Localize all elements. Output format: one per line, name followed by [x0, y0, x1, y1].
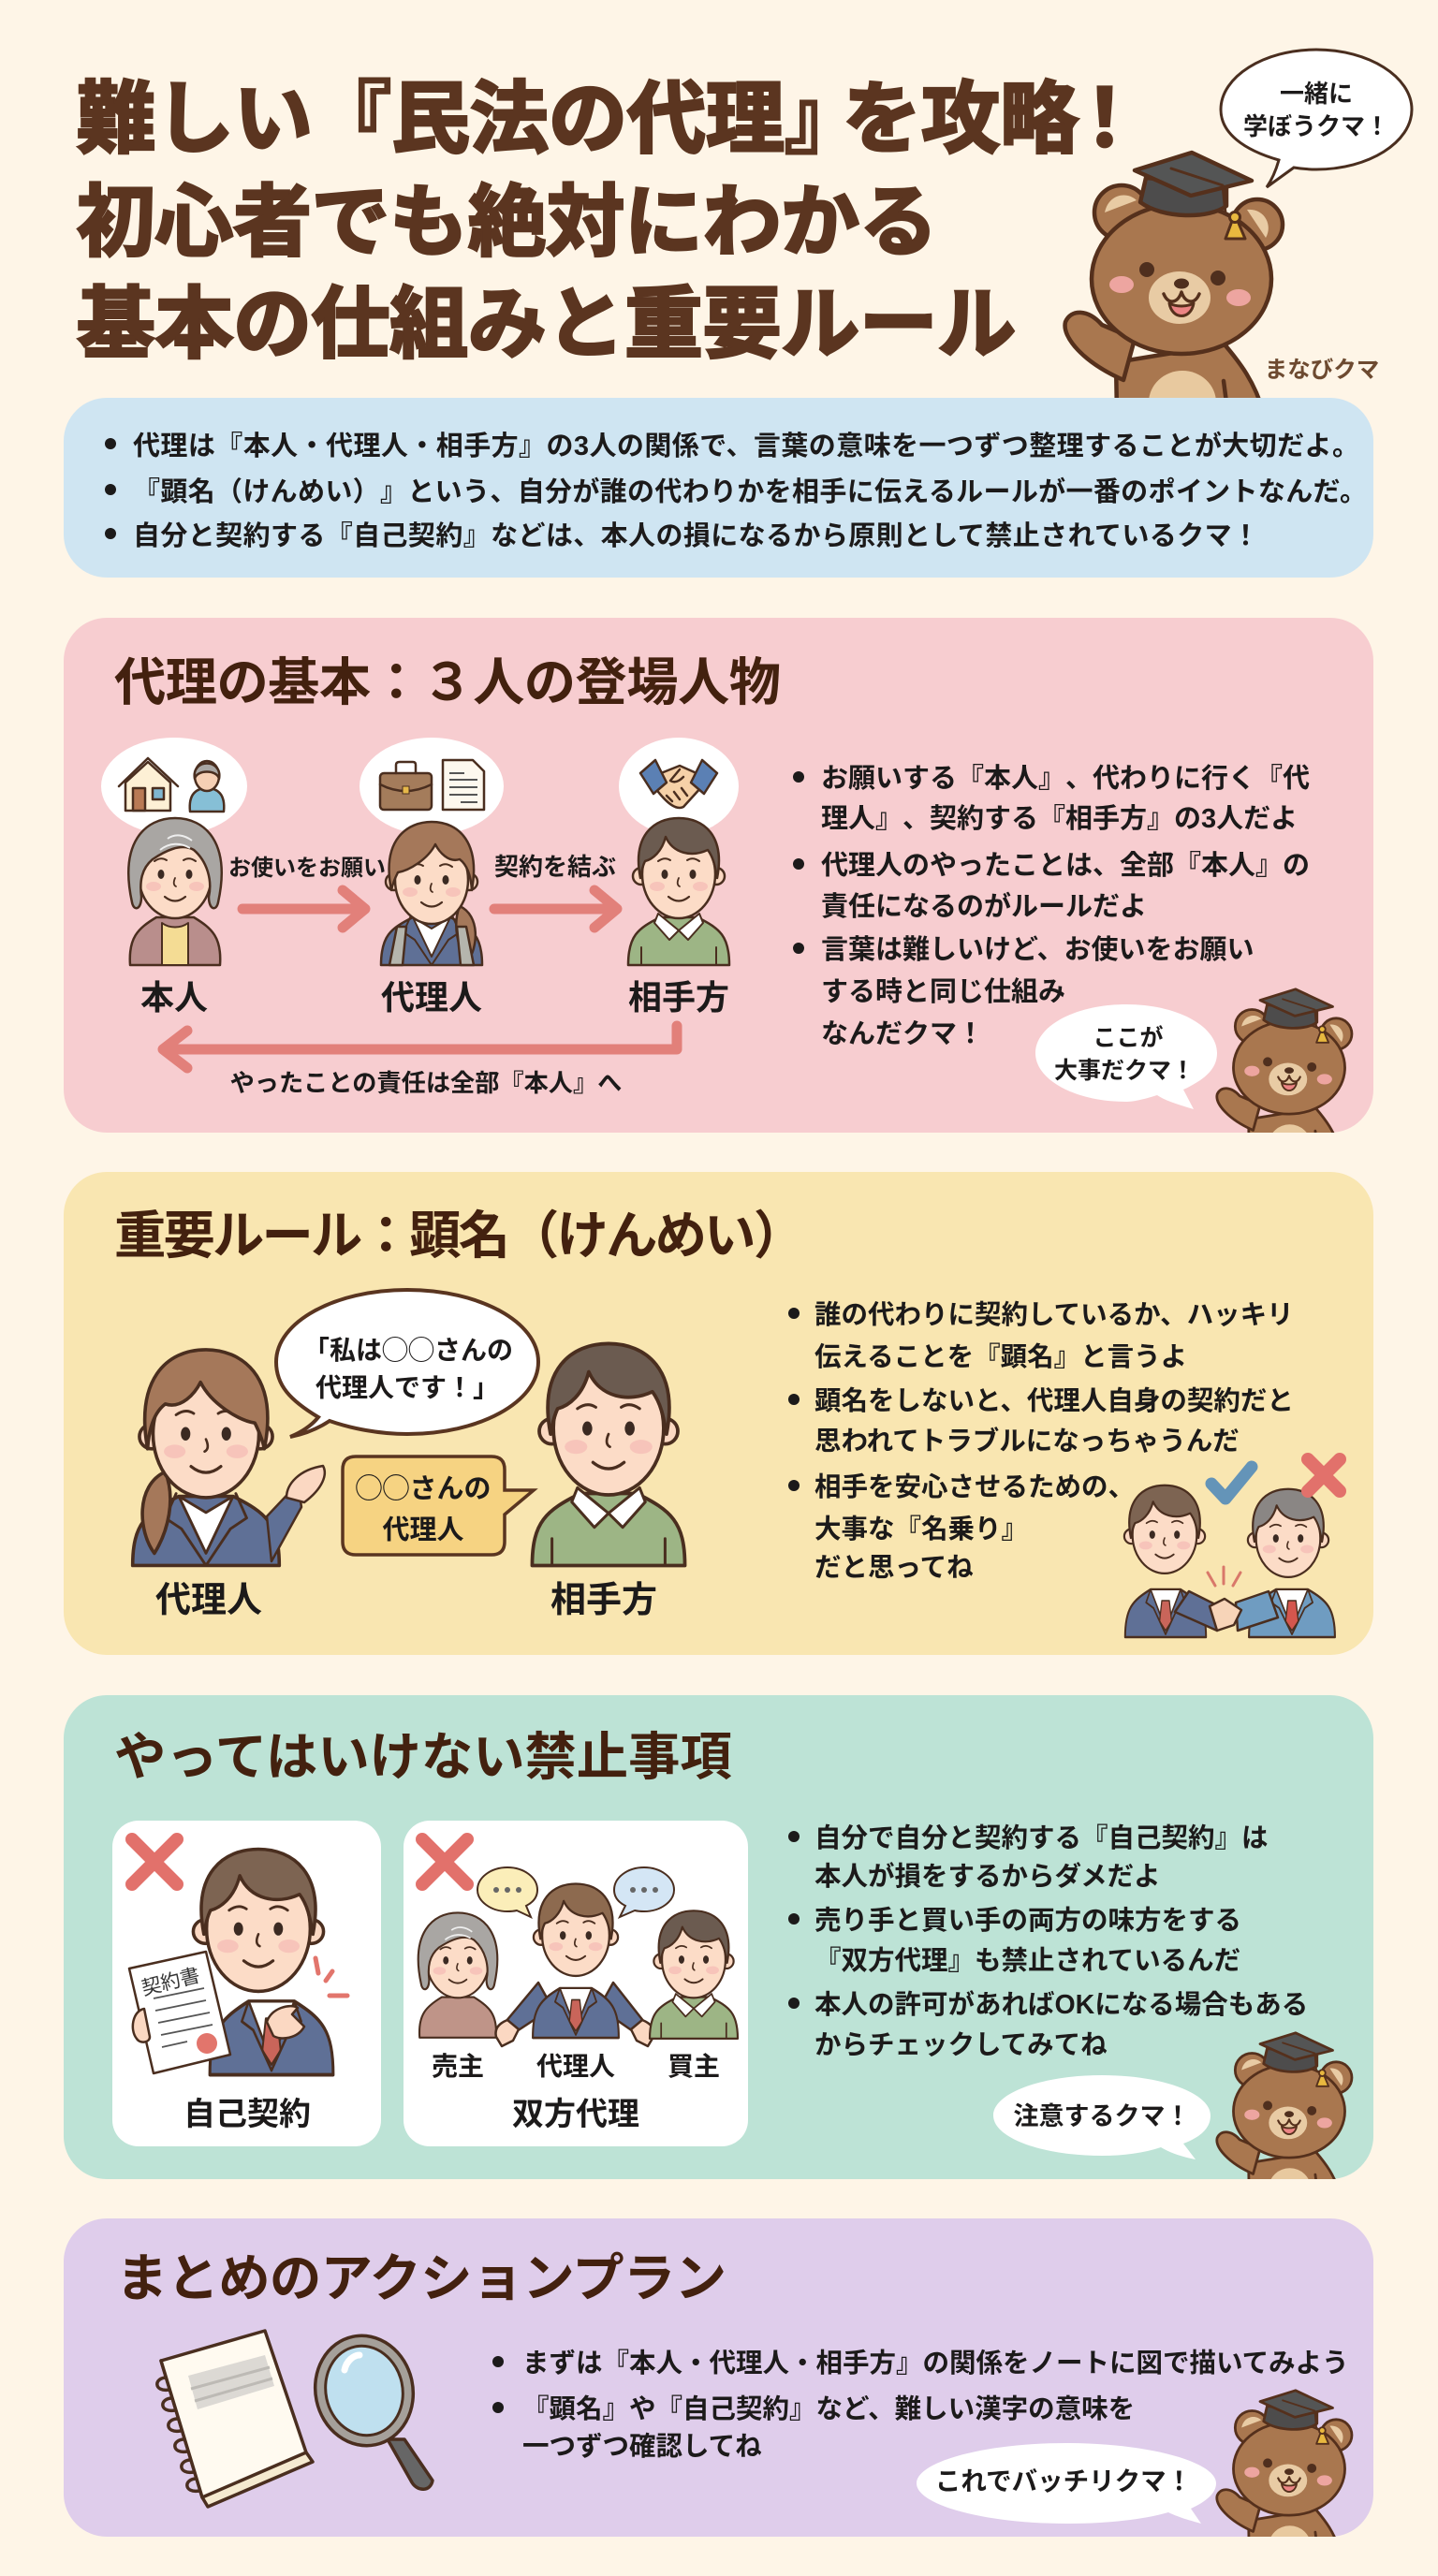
bullets: basics: お願いする『本人』、代わりに行く『代: [821, 763, 1310, 794]
speech bubble: I am the agent: [276, 1290, 538, 1437]
person: agent: [381, 822, 482, 965]
arrow: principal to agent: [242, 890, 365, 928]
speech bubble: important: ここが: [1093, 1024, 1164, 1051]
mascot speech bubble: 一緒に: [1280, 80, 1353, 108]
bullets: prohibited: 本人の許可があればOKになる場合もある: [814, 1989, 1308, 2020]
arrow: agent to counterparty: [494, 890, 617, 928]
person: agent with open arms: [496, 1883, 653, 2046]
arrow label: contract: 契約を結ぶ: [494, 853, 616, 881]
bullets: action plan: まずは『本人・代理人・相手方』の関係をノートに図で描いてみよう: [522, 2349, 1349, 2378]
bullets: disclosure: だと思ってね: [814, 1553, 974, 1583]
summary bullets: 『顕名（けんめい）』という、自分が誰の代わりかを相手に伝えるルールが一番のポイントなんだ。: [133, 476, 1367, 507]
heading: 重要ルール：顕名（けんめい）: [114, 1207, 805, 1265]
panel: action plan: [64, 2218, 1373, 2565]
speech bubble: yellow: [477, 1867, 537, 1917]
bullets: prohibited: [788, 1823, 1308, 2060]
icon bubble: briefcase and document: [360, 738, 504, 835]
bullets: basics: 理人』、契約する『相手方』の3人だよ: [821, 803, 1298, 834]
illustration: handshake good and bad: [1124, 1459, 1340, 1637]
summary bullets: 代理は『本人・代理人・相手方』の3人の関係で、言葉の意味を一つずつ整理することが大切だよ。: [133, 430, 1359, 461]
bullets: basics: 言葉は難しいけど、お使いをお願い: [821, 934, 1255, 965]
title: [77, 75, 1144, 368]
mascot name: まなびクマ: [1265, 357, 1379, 383]
icon: magnifying glass: [305, 2326, 433, 2489]
heading: まとめのアクションプラン: [116, 2249, 726, 2307]
label: counterparty: 相手方: [550, 1581, 657, 1620]
bullets: prohibited: からチェックしてみてね: [814, 2030, 1108, 2060]
person: agent talking: [133, 1350, 325, 1565]
mascot bear: [1215, 988, 1354, 1133]
heading: やってはいけない禁止事項: [114, 1728, 732, 1786]
mascot bear: [1215, 2389, 1354, 2537]
person: principal: [128, 818, 222, 965]
bullets: action plan: [492, 2349, 1349, 2462]
person: pointing at self: [193, 1849, 333, 2075]
speech bubble: caution: [993, 2075, 1211, 2159]
title: 難しい『民法の代理』を攻略！: [77, 75, 1144, 163]
person: counterparty: [628, 818, 729, 965]
card: self-dealing: [112, 1821, 381, 2146]
bullets: disclosure: 相手を安心させるための、: [814, 1472, 1135, 1502]
panel: summary: [64, 398, 1373, 578]
icon: notebook: [157, 2331, 313, 2507]
speech bubble: important: [1035, 1004, 1217, 1109]
bullets: action plan: 『顕名』や『自己契約』など、難しい漢字の意味を: [522, 2394, 1135, 2424]
bullets: disclosure: 思われてトラブルになっちゃうんだ: [814, 1426, 1240, 1456]
person: counterparty listening: [532, 1343, 685, 1566]
label: buyer: 買主: [668, 2052, 720, 2081]
speech bubble: blue: [614, 1867, 674, 1917]
arrow label: request: お使いをお願い: [228, 856, 386, 881]
mascot speech bubble: 学ぼうクマ！: [1243, 112, 1389, 140]
bullets: disclosure: 顕名をしないと、代理人自身の契約だと: [814, 1386, 1294, 1416]
bullets: basics: する時と同じ仕組み: [821, 976, 1065, 1007]
label: agent: 代理人: [155, 1581, 262, 1620]
x mark: [132, 1839, 177, 1884]
panel: disclosure rule: [64, 1172, 1373, 1655]
bullets: basics: [793, 763, 1310, 1049]
contract document: [129, 1952, 230, 2073]
icon bubble: handshake: [619, 738, 739, 835]
label: counterparty: 相手方: [628, 978, 729, 1017]
label: principal: 本人: [140, 978, 208, 1017]
summary bullets: 自分と契約する『自己契約』などは、本人の損になるから原則として禁止されているクマ！: [133, 520, 1259, 551]
person: seller: [418, 1912, 497, 2038]
speech bubble: all set: これでバッチリクマ！: [935, 2466, 1192, 2496]
bullets: prohibited: 自分で自分と契約する『自己契約』は: [814, 1823, 1269, 1853]
label: agent: 代理人: [536, 2052, 615, 2081]
speech bubble: I am the agent: 「私は◯◯さんの: [303, 1336, 513, 1365]
speech bubble: important: 大事だクマ！: [1054, 1058, 1195, 1084]
name tag callout: ◯◯さんの: [355, 1473, 492, 1504]
name tag callout: 代理人: [382, 1515, 464, 1545]
card: dual agency: [404, 1821, 748, 2146]
x mark: [422, 1839, 467, 1884]
contract document: 契約書: [139, 1965, 202, 1999]
speech bubble: caution: 注意するクマ！: [1013, 2102, 1191, 2130]
name tag callout: [343, 1456, 534, 1555]
bullets: basics: なんだクマ！: [821, 1019, 984, 1049]
heading: 代理の基本：３人の登場人物: [114, 653, 781, 711]
responsibility caption: やったことの責任は全部『本人』へ: [230, 1069, 622, 1097]
bullets: prohibited: 本人が損をするからダメだよ: [814, 1861, 1161, 1892]
mascot: manabi bear: [1065, 153, 1283, 434]
label: seller: 売主: [432, 2052, 484, 2081]
bullets: basics: 責任になるのがルールだよ: [821, 890, 1147, 922]
bullets: disclosure: 誰の代わりに契約しているか、ハッキリ: [814, 1300, 1294, 1330]
icon bubble: house and person: [101, 738, 247, 835]
speech bubble: I am the agent: 代理人です！」: [315, 1373, 499, 1402]
bullets: disclosure: 大事な『名乗り』: [814, 1515, 1028, 1544]
label: 自己契約: [183, 2097, 311, 2132]
label: 双方代理: [512, 2097, 639, 2132]
label: agent: 代理人: [381, 978, 482, 1017]
bullets: disclosure: [788, 1300, 1294, 1583]
bullets: basics: 代理人のやったことは、全部『本人』の: [821, 850, 1310, 881]
mascot bear: [1215, 2031, 1354, 2179]
summary bullets: [105, 430, 1367, 551]
mascot speech bubble: [1221, 50, 1412, 187]
bullets: action plan: 一つずつ確認してね: [522, 2432, 762, 2462]
bullets: disclosure: 伝えることを『顕名』と言うよ: [814, 1342, 1187, 1372]
bullets: prohibited: 『双方代理』も禁止されているんだ: [814, 1946, 1240, 1976]
bullets: prohibited: 売り手と買い手の両方の味方をする: [814, 1906, 1241, 1936]
title: 初心者でも絶対にわかる: [77, 178, 938, 266]
speech bubble: all set: [917, 2443, 1216, 2524]
arrow: responsibility returns to principal: [163, 1026, 677, 1068]
panel: basics of agency: [64, 618, 1373, 1164]
person: buyer: [650, 1910, 738, 2039]
title: 基本の仕組みと重要ルール: [77, 280, 1016, 368]
panel: prohibited acts: [64, 1695, 1373, 2207]
